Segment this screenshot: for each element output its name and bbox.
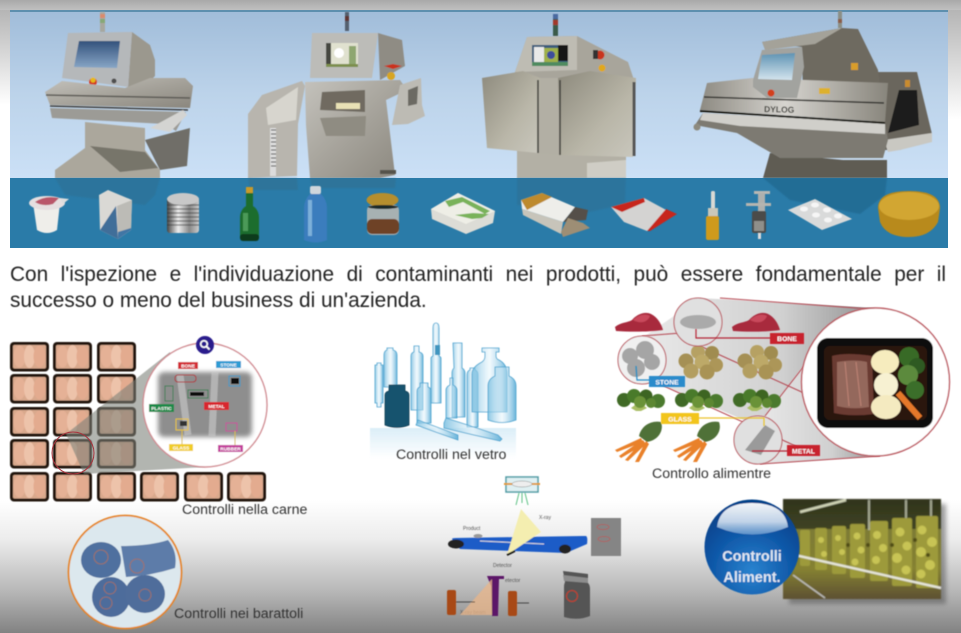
big meal circle (802, 308, 950, 456)
small zoom circles (618, 298, 782, 464)
intro text block (10, 262, 946, 312)
x-ray contaminant labels: STONE (220, 363, 238, 369)
icon: cardboard box (521, 193, 590, 237)
icon: steel can (167, 193, 199, 233)
machine reflections on the band (55, 178, 887, 214)
caption: glass: Controlli nel vetro (396, 447, 507, 463)
panel: food inspection (615, 298, 950, 482)
icon: green bottle (240, 187, 259, 241)
x-ray contaminant labels (149, 361, 243, 453)
magnifier cone (66, 352, 205, 474)
intro text block: Con l'ispezione e l'individuazione di contaminanti nei prodotti, può essere fondamentale per il (10, 262, 946, 286)
x-ray contaminant labels: METAL (208, 404, 225, 410)
contaminant tags: STONE (655, 380, 679, 386)
x-ray jars circle (68, 516, 182, 628)
icon: vial (706, 191, 719, 240)
photo: olive jars on a line (783, 499, 946, 604)
x-ray contaminant labels: BONE (181, 364, 196, 370)
x-ray source (504, 477, 540, 505)
panel: glass inspection (370, 323, 516, 463)
contaminant tags: GLASS (668, 416, 692, 424)
x-ray noise sample (591, 518, 621, 556)
contaminant tags: METAL (792, 448, 815, 456)
icon: inspection machine 1 (45, 12, 193, 178)
x-ray contaminant labels: PLASTIC (151, 406, 172, 412)
blue orb button: Aliment. (723, 570, 781, 586)
icon: jar (366, 193, 399, 235)
diagram labels: Product (463, 526, 481, 532)
zoom cones (645, 298, 880, 464)
diagram labels: X-ray (539, 515, 551, 521)
panel: food control button and photo (704, 499, 946, 604)
contaminant tags: BONE (777, 336, 797, 343)
x-ray contaminant labels: RUBBER (220, 447, 241, 453)
diagram labels (460, 515, 551, 616)
x-ray contaminant labels: GLASS (173, 446, 190, 452)
icon: carton (99, 190, 132, 239)
tray grid (10, 342, 266, 502)
caption: food: Controllo alimentre (652, 466, 771, 482)
blue orb button (704, 500, 800, 594)
icon: blue bottle (304, 186, 327, 242)
icon: syringe (746, 191, 771, 239)
icon: inspection machine 4: DYLOG (764, 104, 795, 115)
diagram labels: etector (505, 578, 521, 584)
x-ray jar (563, 571, 590, 619)
food rows (615, 313, 782, 462)
glass vials and syringes (370, 323, 516, 458)
icon: white tray (431, 193, 495, 234)
icon: inspection machine 3 (482, 14, 636, 178)
icon: blister pack (788, 199, 852, 230)
intro text block: successo o meno del business di un'azienda. (10, 288, 427, 312)
blue product band (10, 178, 948, 248)
caption: jars: Controlli nei barattoli (174, 606, 303, 622)
icon: foil pouch (611, 198, 677, 231)
detector with vials (447, 576, 529, 616)
icon: cheese wheel (878, 191, 940, 237)
caption: meat: Controlli nella carne (182, 502, 307, 518)
panel: jar inspection (68, 516, 303, 628)
icon: inspection machine 4 (694, 11, 932, 178)
contaminant tags (636, 329, 820, 456)
panel: inspection machines and products (10, 10, 948, 248)
icon: yogurt cup (29, 196, 69, 233)
icon: inspection machine 2 (248, 12, 425, 178)
panel: x-ray diagram (447, 477, 621, 619)
icon: magnifier badge (196, 336, 214, 354)
x-ray beam (507, 509, 541, 555)
x-ray magnified view (143, 343, 267, 467)
diagram labels: X-ray beam (460, 610, 486, 616)
blue orb button: Controlli (722, 549, 782, 565)
panel: meat inspection (10, 336, 307, 518)
diagram labels: Detector (493, 563, 512, 569)
conveyor belt (448, 534, 587, 554)
